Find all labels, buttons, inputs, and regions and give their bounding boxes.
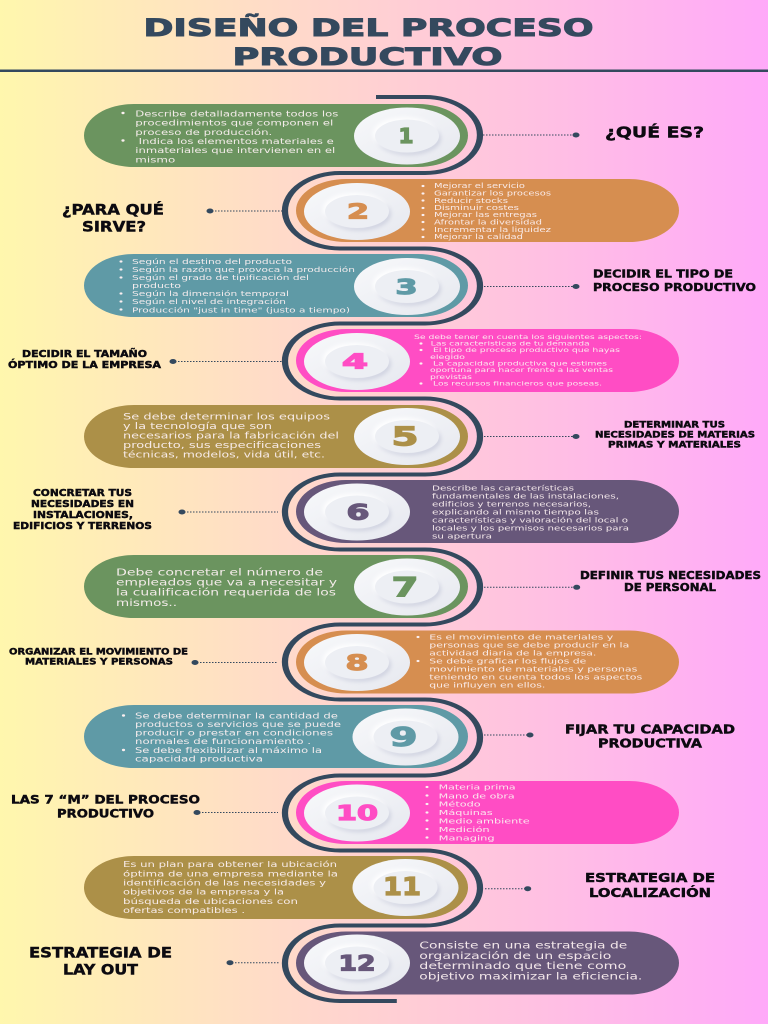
label 4: DECIDIR EL TAMAÑO <box>22 349 147 360</box>
text block 7 <box>116 566 337 609</box>
text block 9: Se debe flexibilizar al máximo la <box>135 746 322 755</box>
title <box>144 13 594 71</box>
text block 2: Mejorar el servicio <box>434 182 525 190</box>
label 6: INSTALACIONES, <box>33 510 133 521</box>
number disc 4 <box>304 333 410 390</box>
panel: step 12 <box>296 932 679 994</box>
panel: step 9 <box>84 705 468 768</box>
number disc 10 <box>304 784 410 842</box>
panel: step 2 <box>296 179 679 242</box>
number disc 4: 4 <box>342 350 368 374</box>
text block 4: El tipo de proceso productivo que hayas <box>433 346 621 354</box>
number disc 7 <box>354 558 460 616</box>
text block 2 <box>434 182 551 241</box>
text block 1 <box>135 108 338 164</box>
text block 1: proceso de producción. <box>135 127 272 137</box>
text block 6: características y valoración del local o <box>432 516 628 525</box>
text block 5 <box>123 412 339 460</box>
text block 6: Describe las características <box>432 484 574 493</box>
connector 10 <box>194 810 278 815</box>
label 11: ESTRATEGIA DE <box>585 870 715 885</box>
connector 11 <box>485 886 531 891</box>
text block 3: producto <box>132 281 181 290</box>
text block 1: procedimientos que componen el <box>135 117 333 127</box>
text block 1: Indica los elementos materiales e <box>139 136 334 146</box>
text block 3: Según la razón que provoca la producción <box>132 265 355 274</box>
text block 7: empleados que va a necesitar y <box>116 577 337 588</box>
pill 2 <box>296 179 679 242</box>
text block 12: organización de un espacio <box>419 950 611 962</box>
pill 10 <box>296 781 679 844</box>
text block 12: objetivo maximizar la eficiencia. <box>419 971 642 982</box>
text block 8: Es el movimiento de materiales y <box>429 632 614 641</box>
text block 2: Afrontar la diversidad <box>434 218 542 226</box>
text block 4: La capacidad productiva que estimes <box>433 360 608 368</box>
label 5 <box>595 421 755 451</box>
number disc 1 <box>354 108 460 164</box>
number disc 7: 7 <box>392 572 418 604</box>
text block 9: productos o servicios que se puede <box>135 720 341 729</box>
panel: step 6 <box>296 480 679 543</box>
connector 1 <box>483 132 580 138</box>
text block 2: Incrementar la liquidez <box>434 226 551 234</box>
number disc 10: 10 <box>336 801 378 825</box>
pill 9 <box>84 705 468 768</box>
text block 8: teniendo en cuenta todos los aspectos <box>429 672 643 681</box>
text block 4: oportuna para hacer frente a las ventas <box>430 366 614 374</box>
text block 11: óptima de una empresa mediante la <box>123 869 338 879</box>
text block 2: Reducir stocks <box>434 197 509 205</box>
winding S-curve connector <box>285 97 480 1001</box>
label 4 <box>8 349 162 371</box>
label 3: PROCESO PRODUCTIVO <box>593 282 756 294</box>
text block 9: Se debe determinar la cantidad de <box>135 711 338 720</box>
label 12: ESTRATEGIA DE <box>29 946 172 962</box>
text block 8: actividad diaria de la empresa. <box>429 649 596 658</box>
text block 5: necesarios para la fabricación del <box>123 431 339 442</box>
label 4: ÓPTIMO DE LA EMPRESA <box>8 359 162 371</box>
label 6: EDIFICIOS Y TERRENOS <box>13 521 152 532</box>
connector 2 <box>206 208 284 214</box>
text block 6: su apertura <box>432 532 492 541</box>
text block 12: Consiste en una estrategia de <box>419 941 627 952</box>
text block 8: que influyen en ellos. <box>429 680 545 689</box>
label 9: FIJAR TU CAPACIDAD <box>565 723 735 737</box>
text block 10: Método <box>439 800 481 809</box>
panel: step 7 <box>84 555 468 618</box>
text block 1: mismo <box>135 154 175 164</box>
text block 10: Mano de obra <box>439 791 515 800</box>
pill 11 <box>84 856 468 919</box>
text block 2: Garantizar los procesos <box>434 189 551 197</box>
text block 12 <box>419 941 642 982</box>
number disc 12 <box>304 934 410 992</box>
label 8: MATERIALES Y PERSONAS <box>25 658 173 668</box>
text block 5: Se debe determinar los equipos <box>123 413 330 423</box>
text block 3: Según el nivel de integración <box>132 297 286 306</box>
connector 4 <box>170 359 283 364</box>
text block 10: Medio ambiente <box>439 816 531 825</box>
text block 5: técnicas, modelos, vida útil, etc. <box>123 450 325 461</box>
text block 8 <box>429 632 643 689</box>
label 6: NECESIDADES EN <box>31 499 134 510</box>
pill 8 <box>296 630 679 694</box>
pill 7 <box>84 555 468 618</box>
text block 6: locales y los permisos necesarios para <box>432 524 629 533</box>
pill 12 <box>296 932 679 994</box>
label 2 <box>62 202 164 235</box>
label 6 <box>13 488 152 532</box>
text block 5: y la tecnología que son <box>123 422 272 432</box>
text block 9: capacidad productiva <box>135 755 263 764</box>
panel: step 10 <box>296 781 679 844</box>
text block 4: previstas <box>430 373 473 381</box>
number disc 6 <box>304 484 410 540</box>
number disc 5: 5 <box>392 422 418 452</box>
text block 9: normales de funcionamiento . <box>135 737 311 746</box>
title: PRODUCTIVO <box>232 43 502 71</box>
text block 10 <box>439 783 531 842</box>
text block 7: la cualificación requerida de los <box>116 587 336 599</box>
text block 11: identificación de las necesidades y <box>123 878 326 888</box>
text block 10: Máquinas <box>439 808 493 817</box>
label 7 <box>580 571 761 594</box>
text block 3: Según el destino del producto <box>132 257 292 266</box>
number disc 5 <box>354 408 460 465</box>
text block 5: producto, sus especificaciones <box>123 441 321 451</box>
text block 2: Mejorar las entregas <box>434 211 537 219</box>
text block 11 <box>123 859 338 915</box>
label 7: DEFINIR TUS NECESIDADES <box>580 571 761 582</box>
label 1: ¿QUÉ ES? <box>605 123 704 142</box>
text block 11: búsqueda de ubicaciones con <box>123 896 298 906</box>
label 10: LAS 7 “M” DEL PROCESO <box>11 793 200 807</box>
connector 7 <box>484 585 580 590</box>
text block 8: personas que se debe producir en la <box>429 641 629 650</box>
text block 3: Según el grado de tipificación del <box>132 273 309 282</box>
text block 3 <box>132 257 355 314</box>
pill 1 <box>84 104 468 167</box>
pill 4 <box>296 329 679 392</box>
label 10 <box>11 793 200 821</box>
label 10: PRODUCTIVO <box>57 807 154 821</box>
number disc 1: 1 <box>398 124 414 148</box>
text block 4: Los recursos financieros que poseas. <box>433 380 602 388</box>
connector 5 <box>484 434 580 439</box>
title: DISEÑO DEL PROCESO <box>144 13 594 42</box>
text block 6: fundamentales de las instalaciones, <box>432 492 619 501</box>
panel: step 5 <box>84 405 468 468</box>
text block 6: explicando al mismo tiempo las <box>432 508 599 517</box>
panel: step 11 <box>84 856 468 919</box>
number disc 2: 2 <box>347 200 369 224</box>
number disc 2 <box>304 183 410 240</box>
text block 9 <box>135 711 341 764</box>
text block 4: elegido <box>430 353 465 361</box>
label 9: PRODUCTIVA <box>598 737 703 751</box>
text block 3: Producción "just in time" (justo a tiempo) <box>132 305 350 314</box>
label 12: LAY OUT <box>63 963 139 979</box>
connector 6 <box>178 510 278 514</box>
text block 11: ofertas compatibles . <box>123 905 245 915</box>
text block 4: Se debe tener en cuenta los siguientes aspectos: <box>414 333 642 341</box>
number disc 8: 8 <box>346 651 368 675</box>
connector 9 <box>484 732 534 738</box>
number disc 9: 9 <box>390 723 418 753</box>
pill 5 <box>84 405 468 468</box>
text block 6 <box>432 484 629 541</box>
text block 12: determinado que tiene como <box>419 961 626 972</box>
number disc 9 <box>352 708 458 766</box>
text block 1: Describe detalladamente todos los <box>135 108 338 118</box>
number disc 11 <box>352 859 458 916</box>
label 3: DECIDIR EL TIPO DE <box>593 269 733 281</box>
text block 11: objetivos de la empresa y la <box>123 887 284 897</box>
label 9 <box>565 723 735 751</box>
text block 4 <box>414 333 642 388</box>
label 6: CONCRETAR TUS <box>33 488 132 499</box>
text block 1: inmateriales que intervienen en el <box>135 145 335 155</box>
text block 10: Medición <box>439 825 490 834</box>
text block 7: Debe concretar el número de <box>116 566 323 578</box>
text block 8: Se debe graficar los flujos de <box>429 657 587 666</box>
text block 4: Las caracteristicas de tu demanda <box>431 340 590 348</box>
panel: step 8 <box>296 630 679 694</box>
number disc 12: 12 <box>338 952 376 976</box>
text block 2: Disminuir costes <box>434 204 519 212</box>
pill 6 <box>296 480 679 543</box>
text block 9: producir o prestar en condiciones <box>135 729 333 738</box>
text block 10: Managing <box>439 833 495 842</box>
label 5: PRIMAS Y MATERIALES <box>608 441 741 451</box>
label 5: NECESIDADES DE MATERIAS <box>595 431 755 441</box>
text block 3: Según la dimensión temporal <box>132 289 289 298</box>
label 11: LOCALIZACIÓN <box>589 885 711 900</box>
label 5: DETERMINAR TUS <box>624 421 725 431</box>
number disc 8 <box>304 634 410 691</box>
number disc 6: 6 <box>346 500 370 524</box>
text block 7: mismos.. <box>116 598 177 609</box>
label 2: ¿PARA QUÉ <box>62 202 164 219</box>
number disc 3: 3 <box>396 275 418 299</box>
label 2: SIRVE? <box>82 219 146 235</box>
label 12 <box>29 946 172 979</box>
number disc 11: 11 <box>383 872 421 901</box>
label 8 <box>9 648 188 668</box>
text block 8: movimiento de materiales y personas <box>429 664 638 673</box>
connector 12 <box>226 960 279 965</box>
text block 10: Materia prima <box>439 783 516 792</box>
pill 3 <box>84 254 468 317</box>
panel: step 3 <box>84 254 468 317</box>
number disc 3 <box>354 258 460 315</box>
panel: step 1 <box>84 104 468 167</box>
connector 3 <box>484 284 580 289</box>
panel: step 4 <box>296 329 679 392</box>
label 3 <box>593 269 756 294</box>
text block 2: Mejorar la calidad <box>434 233 523 241</box>
connector 8 <box>192 660 278 665</box>
label 7: DE PERSONAL <box>624 583 717 594</box>
label 8: ORGANIZAR EL MOVIMIENTO DE <box>9 648 188 658</box>
text block 11: Es un plan para obtener la ubicación <box>123 859 337 869</box>
label 11 <box>585 870 715 900</box>
text block 6: edificios y terrenos necesarios, <box>432 500 591 509</box>
